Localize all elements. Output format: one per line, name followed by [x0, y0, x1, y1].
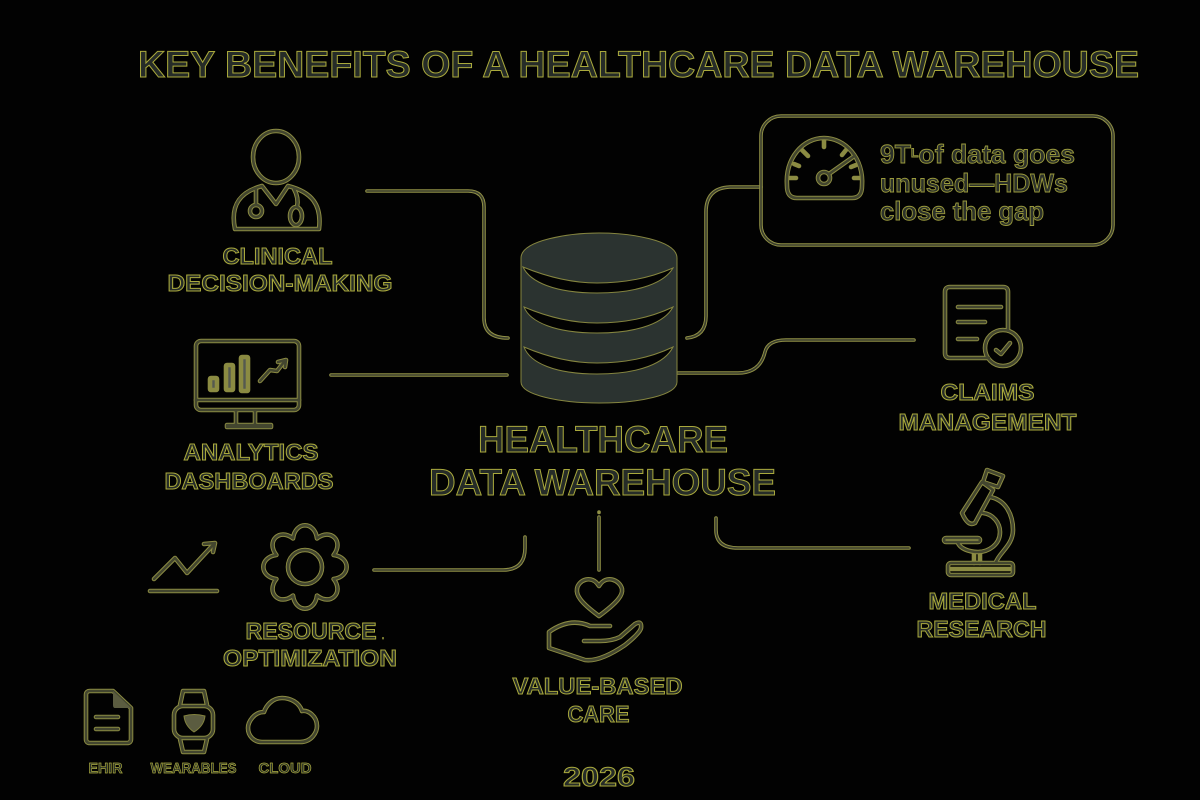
callout text: close the gap	[880, 196, 1044, 226]
panel: analytics dashboards	[164, 341, 334, 494]
title: KEY BENEFITS OF A HEALTHCARE DATA WAREHOUSE	[138, 44, 1139, 85]
icon: microscope	[944, 470, 1013, 575]
callout text: unused—HDWs	[880, 168, 1068, 198]
panel: value-based care	[512, 579, 682, 727]
connector: warehouse to medical research	[716, 518, 909, 548]
label: claims management: MANAGEMENT	[898, 409, 1076, 435]
label: clinical decision-making	[168, 243, 392, 296]
label: clinical decision-making: CLINICAL	[222, 243, 332, 269]
connector: analytics dashboards to warehouse	[331, 373, 507, 377]
heading: healthcare data warehouse: HEALTHCARE	[478, 419, 728, 460]
panel: callout statistic	[761, 116, 1113, 245]
panel: resource optimization	[150, 525, 397, 671]
year label: 2026	[563, 762, 635, 792]
connector: warehouse to claims management	[678, 340, 914, 373]
label: cloud: CLOUD	[258, 760, 312, 777]
label: resource optimization: OPTIMIZATION	[223, 645, 397, 671]
panel: cloud source	[248, 698, 317, 777]
label: claims management	[898, 379, 1076, 435]
label: clinical decision-making: DECISION-MAKING	[168, 270, 392, 296]
callout text: of data goes	[919, 139, 1075, 169]
icon: doctor with stethoscope	[234, 131, 320, 229]
icon: trend arrow	[150, 543, 217, 591]
icon: cloud	[248, 698, 317, 742]
icon: monitor with chart	[196, 341, 299, 427]
label: value-based care: CARE	[568, 701, 630, 727]
callout text: L	[911, 146, 919, 160]
icon: EHR document	[86, 691, 131, 743]
icon: gear	[263, 525, 347, 609]
label: medical research	[916, 588, 1046, 642]
panel: wearables source	[150, 691, 236, 777]
panel: claims management	[898, 287, 1076, 435]
icon: smartwatch	[174, 691, 213, 752]
icon: document with check	[945, 287, 1021, 366]
panel: EHIR source	[86, 691, 131, 777]
label: analytics dashboards	[164, 439, 334, 494]
label: analytics dashboards: DASHBOARDS	[164, 468, 334, 494]
heading: healthcare data warehouse	[429, 419, 776, 503]
panel: clinical decision-making	[168, 131, 392, 296]
connector: resource optimization to warehouse	[374, 537, 525, 570]
callout text: 9T	[880, 139, 910, 169]
connector: warehouse to value-based care	[597, 512, 601, 570]
label: resource optimization: RESOURCE	[246, 618, 376, 644]
icon: speedometer gauge	[787, 138, 862, 198]
label: value-based care: VALUE-BASED	[512, 673, 682, 699]
label: analytics dashboards: ANALYTICS	[184, 439, 318, 465]
label: EHIR: EHIR	[88, 760, 123, 777]
label: wearables: WEARABLES	[150, 760, 236, 777]
connector: clinical decision-making to warehouse	[367, 191, 508, 338]
label: medical research: RESEARCH	[916, 616, 1046, 642]
label: resource optimization	[223, 618, 397, 671]
heading: healthcare data warehouse: DATA WAREHOUSE	[429, 462, 776, 503]
label: value-based care	[512, 673, 682, 727]
callout box	[761, 116, 1113, 245]
callout text	[880, 139, 1075, 226]
label: claims management: CLAIMS	[940, 379, 1034, 405]
label: medical research: MEDICAL	[928, 588, 1036, 614]
panel: medical research	[916, 470, 1046, 642]
icon: database cylinder	[521, 233, 677, 403]
icon: heart in hand	[549, 579, 641, 660]
connector: warehouse to callout	[687, 187, 761, 338]
label: resource optimization: .	[382, 631, 385, 642]
